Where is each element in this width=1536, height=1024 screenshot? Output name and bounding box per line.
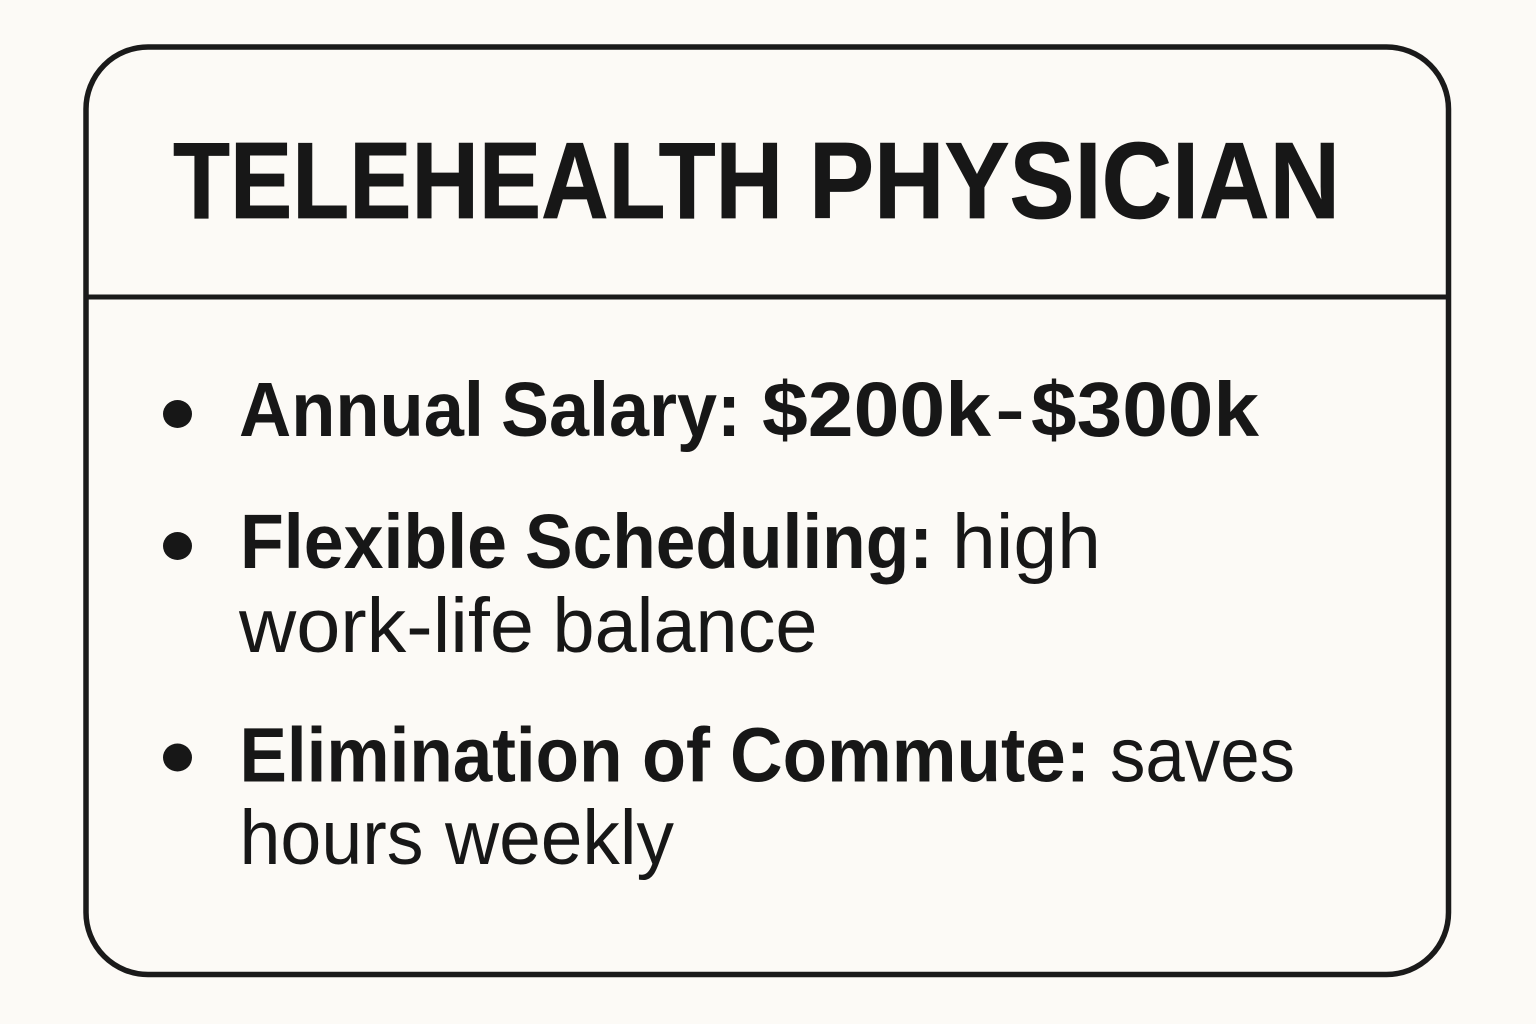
bullet text: Elimination [240,712,622,798]
bullet text: balance [552,583,818,669]
bullet text [238,499,1101,669]
title [173,120,1340,242]
bullet text: – [998,367,1022,453]
bullet: elimination of commute [163,712,1295,881]
bullet text: saves [1110,712,1295,798]
bullet: flexible scheduling [163,499,1101,669]
bullet text: of [642,712,710,798]
title: TELEHEALTH [173,120,783,242]
bullet text: $200k [762,367,991,453]
bullet: annual salary [163,367,1259,453]
bullet dot [163,400,192,428]
title: PHYSICIAN [809,120,1340,242]
bullet text: high [952,499,1101,585]
bullet text: work-life [238,583,534,669]
bullet text: Scheduling: [525,499,933,585]
bullet text: hours [240,795,424,881]
bullet text: Salary: [501,367,741,453]
bullet text: Annual [239,367,484,453]
bullet text [240,712,1295,881]
bullet text [239,367,1259,453]
bullet text: $300k [1031,367,1259,453]
bullet text: weekly [444,795,674,881]
bullet dot [163,532,192,560]
bullet dot [163,744,192,772]
bullet text: Commute: [730,712,1090,798]
bullet text: Flexible [240,499,507,585]
